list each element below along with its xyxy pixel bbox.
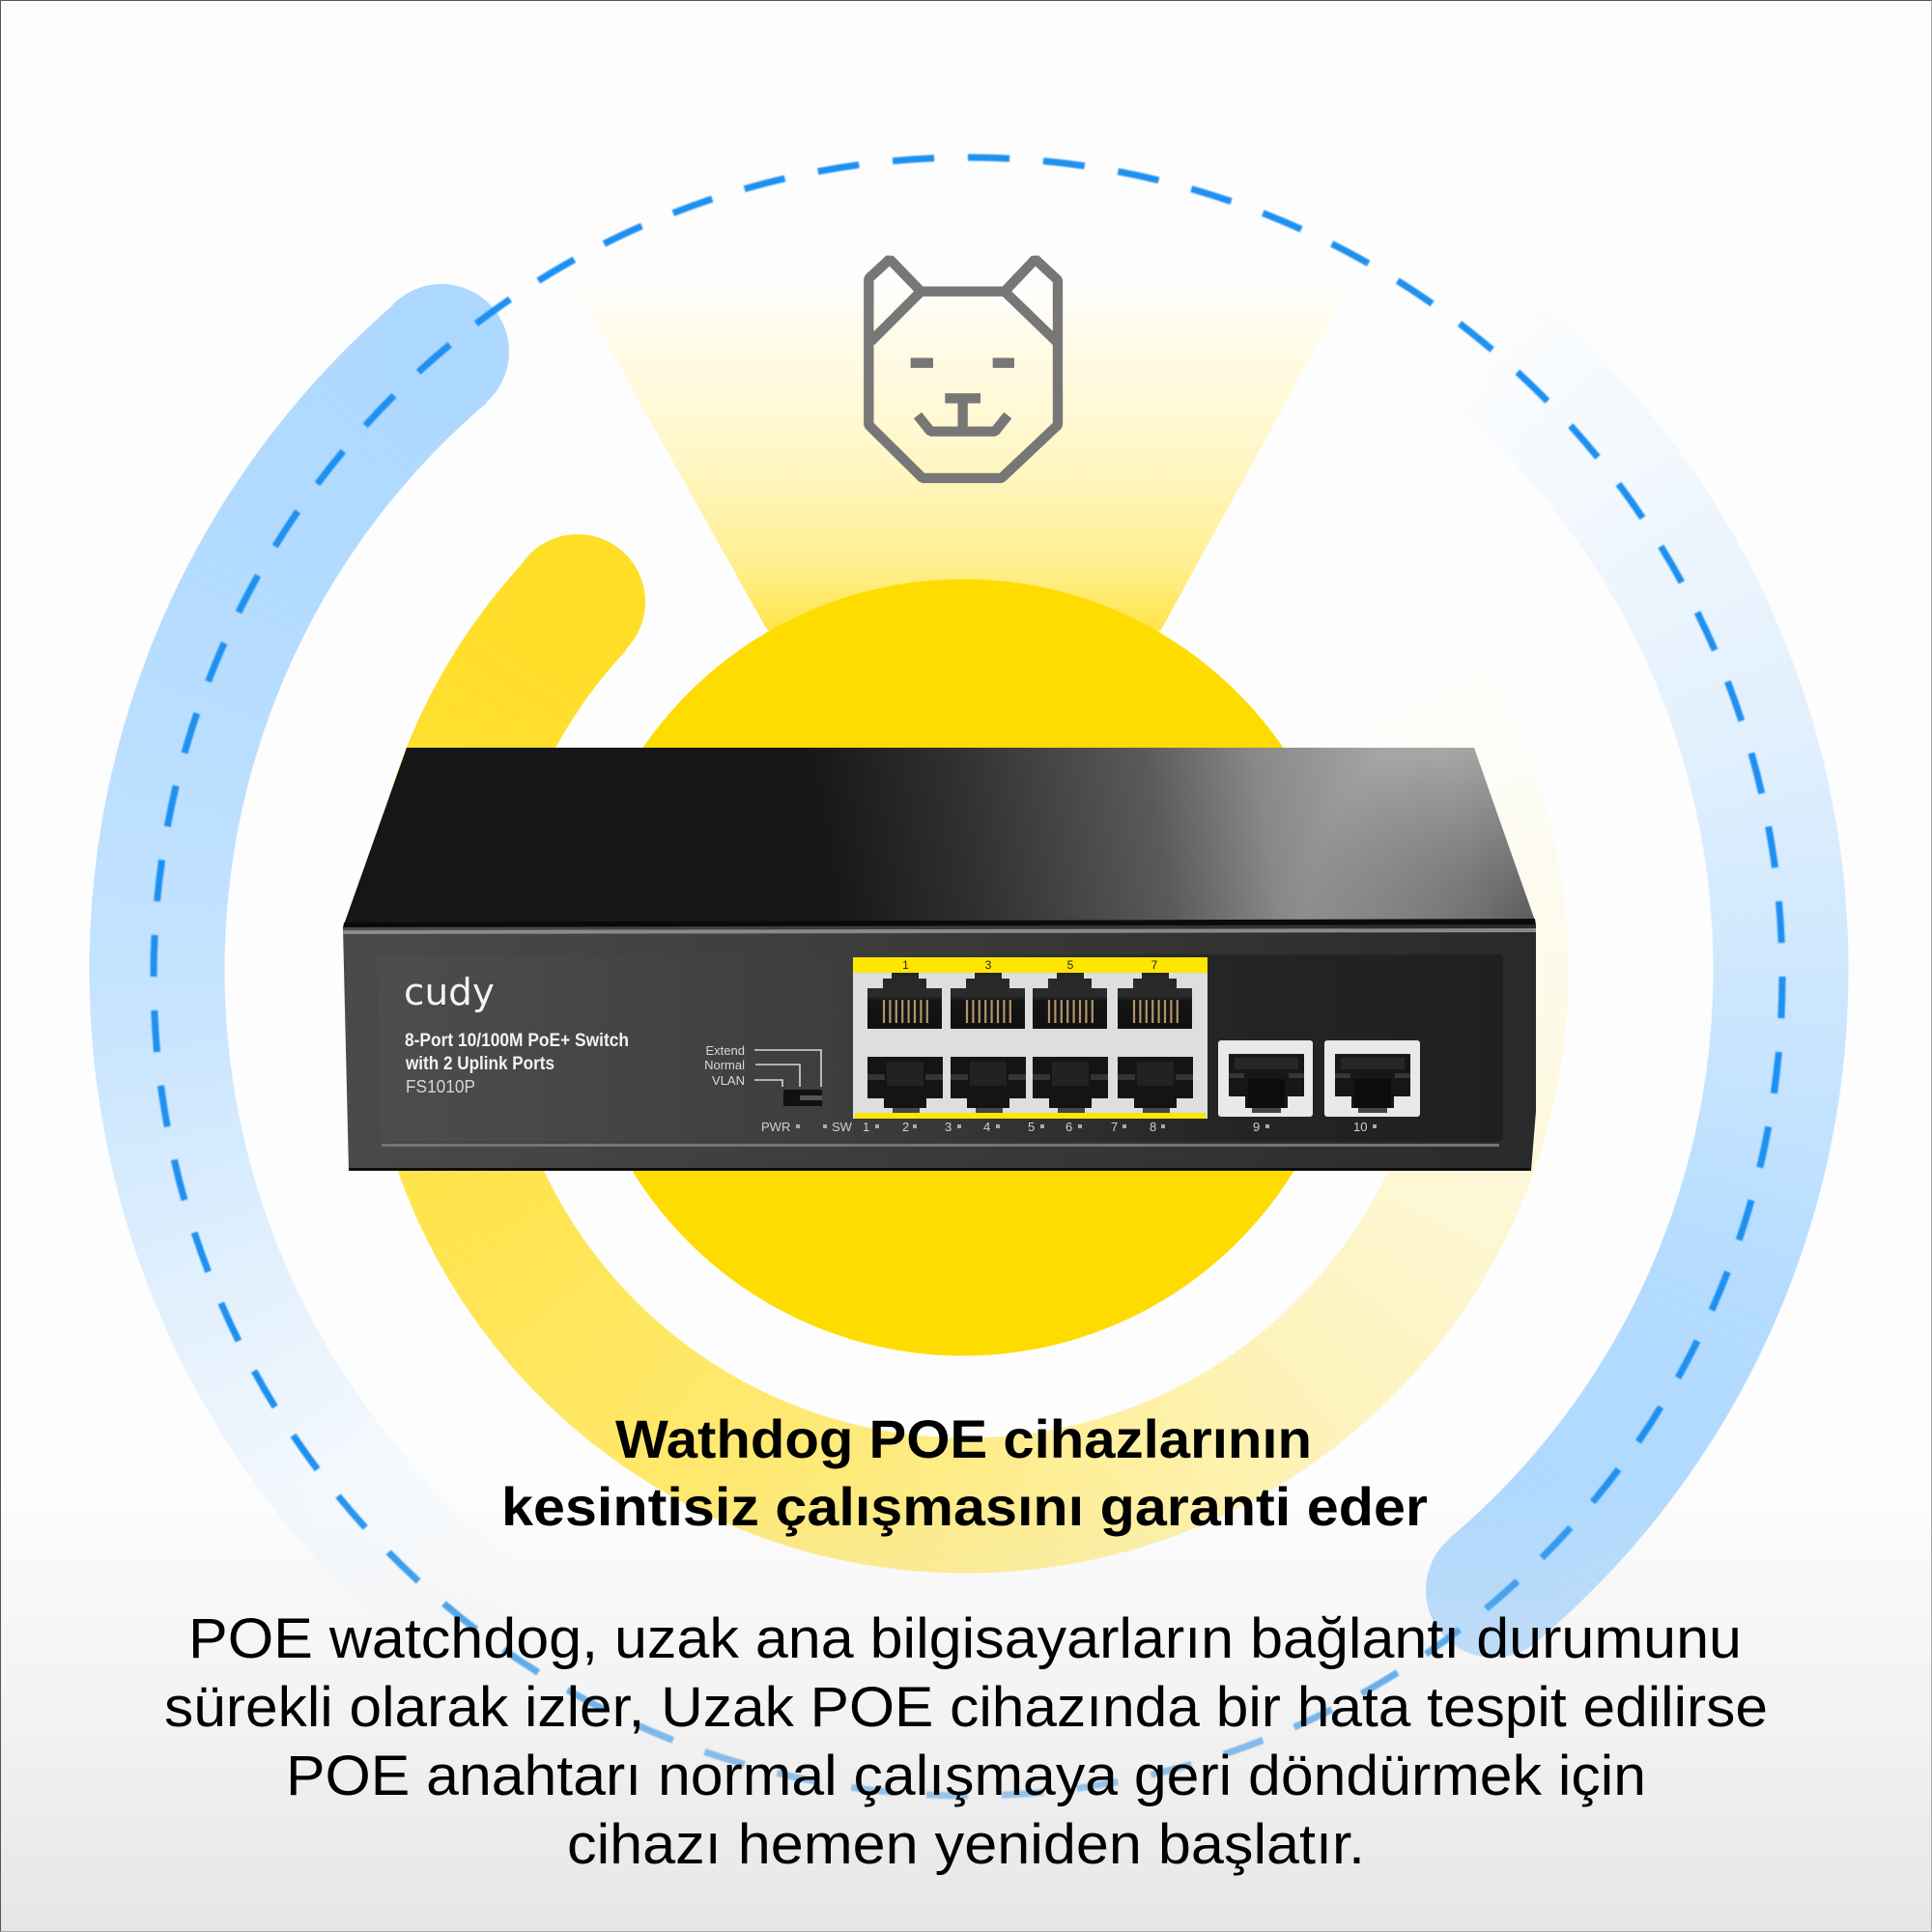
brand and model text [404, 971, 629, 1096]
uplink port 9 [1218, 1040, 1313, 1117]
product line 2: with 2 Uplink Ports [405, 1054, 554, 1074]
body paragraph [164, 1607, 1768, 1876]
logo: cudy: cudy [404, 971, 495, 1013]
top row ports [867, 973, 1192, 1029]
heading: Wathdog POE cihazlarının [615, 1408, 1312, 1469]
bottom grey fade [0, 1478, 1932, 1932]
heading [501, 1408, 1428, 1537]
mode selector labels and lines: VLAN [712, 1073, 745, 1088]
status labels: 5 [1028, 1120, 1035, 1134]
yellow sun circle [575, 580, 1351, 1356]
body paragraph: POE anahtarı normal çalışmaya geri döndürmek için [286, 1745, 1646, 1807]
switch lid [343, 748, 1536, 927]
front panel inset [377, 954, 1503, 1142]
status labels: 2 [902, 1120, 909, 1134]
status labels: 7 [1111, 1120, 1118, 1134]
blue fading ring arcs [89, 284, 1849, 1658]
yellow beam toward dog [577, 290, 1348, 734]
dark lid front lip [343, 919, 1536, 929]
top port numbers: 7 [1151, 958, 1158, 972]
yellow fading ring arc [387, 534, 1569, 1574]
status labels: 6 [1065, 1120, 1072, 1134]
top port numbers: 1 [902, 958, 909, 972]
product line 1: 8-Port 10/100M PoE+ Switch [405, 1031, 629, 1051]
top port numbers: 5 [1067, 958, 1074, 972]
blue arc cap top-left [374, 284, 509, 419]
body paragraph: sürekli olarak izler, Uzak POE cihazında bir hata tespit edilirse [164, 1676, 1768, 1739]
status labels: 3 [945, 1120, 952, 1134]
network switch [343, 748, 1536, 1171]
mode selector labels and lines: Normal [704, 1058, 745, 1072]
body paragraph: POE watchdog, uzak ana bilgisayarların bağlantı durumunu [188, 1607, 1742, 1670]
body paragraph: cihazı hemen yeniden başlatır. [567, 1813, 1365, 1876]
status labels: PWR [761, 1120, 790, 1134]
dashed blue ring [154, 157, 1782, 1796]
status labels: 8 [1150, 1120, 1156, 1134]
icon: dog face [868, 259, 1058, 478]
lid lower-right shading [1159, 748, 1536, 925]
silver top edge [343, 928, 1536, 934]
bottom shadow edge [349, 1168, 1531, 1171]
status labels: 10 [1353, 1120, 1367, 1134]
bottom row ports [867, 1057, 1193, 1113]
top port numbers [902, 958, 1158, 972]
top port numbers: 3 [985, 958, 992, 972]
status labels: 4 [983, 1120, 990, 1134]
status labels: SW [832, 1120, 853, 1134]
status labels [761, 1120, 1377, 1134]
silver lower edge [382, 1144, 1499, 1147]
PoE port block [853, 957, 1208, 1119]
switch front face [343, 924, 1536, 1171]
mode selector labels and lines: Extend [706, 1043, 745, 1058]
uplink port 10 [1324, 1040, 1420, 1117]
status labels: 9 [1253, 1120, 1260, 1134]
yellow arc cap [510, 534, 645, 669]
status labels: 1 [863, 1120, 869, 1134]
blue arc cap bottom-right [1426, 1522, 1561, 1658]
model number: FS1010P [406, 1077, 475, 1096]
mode selector labels and lines [704, 1043, 822, 1106]
heading: kesintisiz çalışmasını garanti eder [501, 1476, 1428, 1537]
